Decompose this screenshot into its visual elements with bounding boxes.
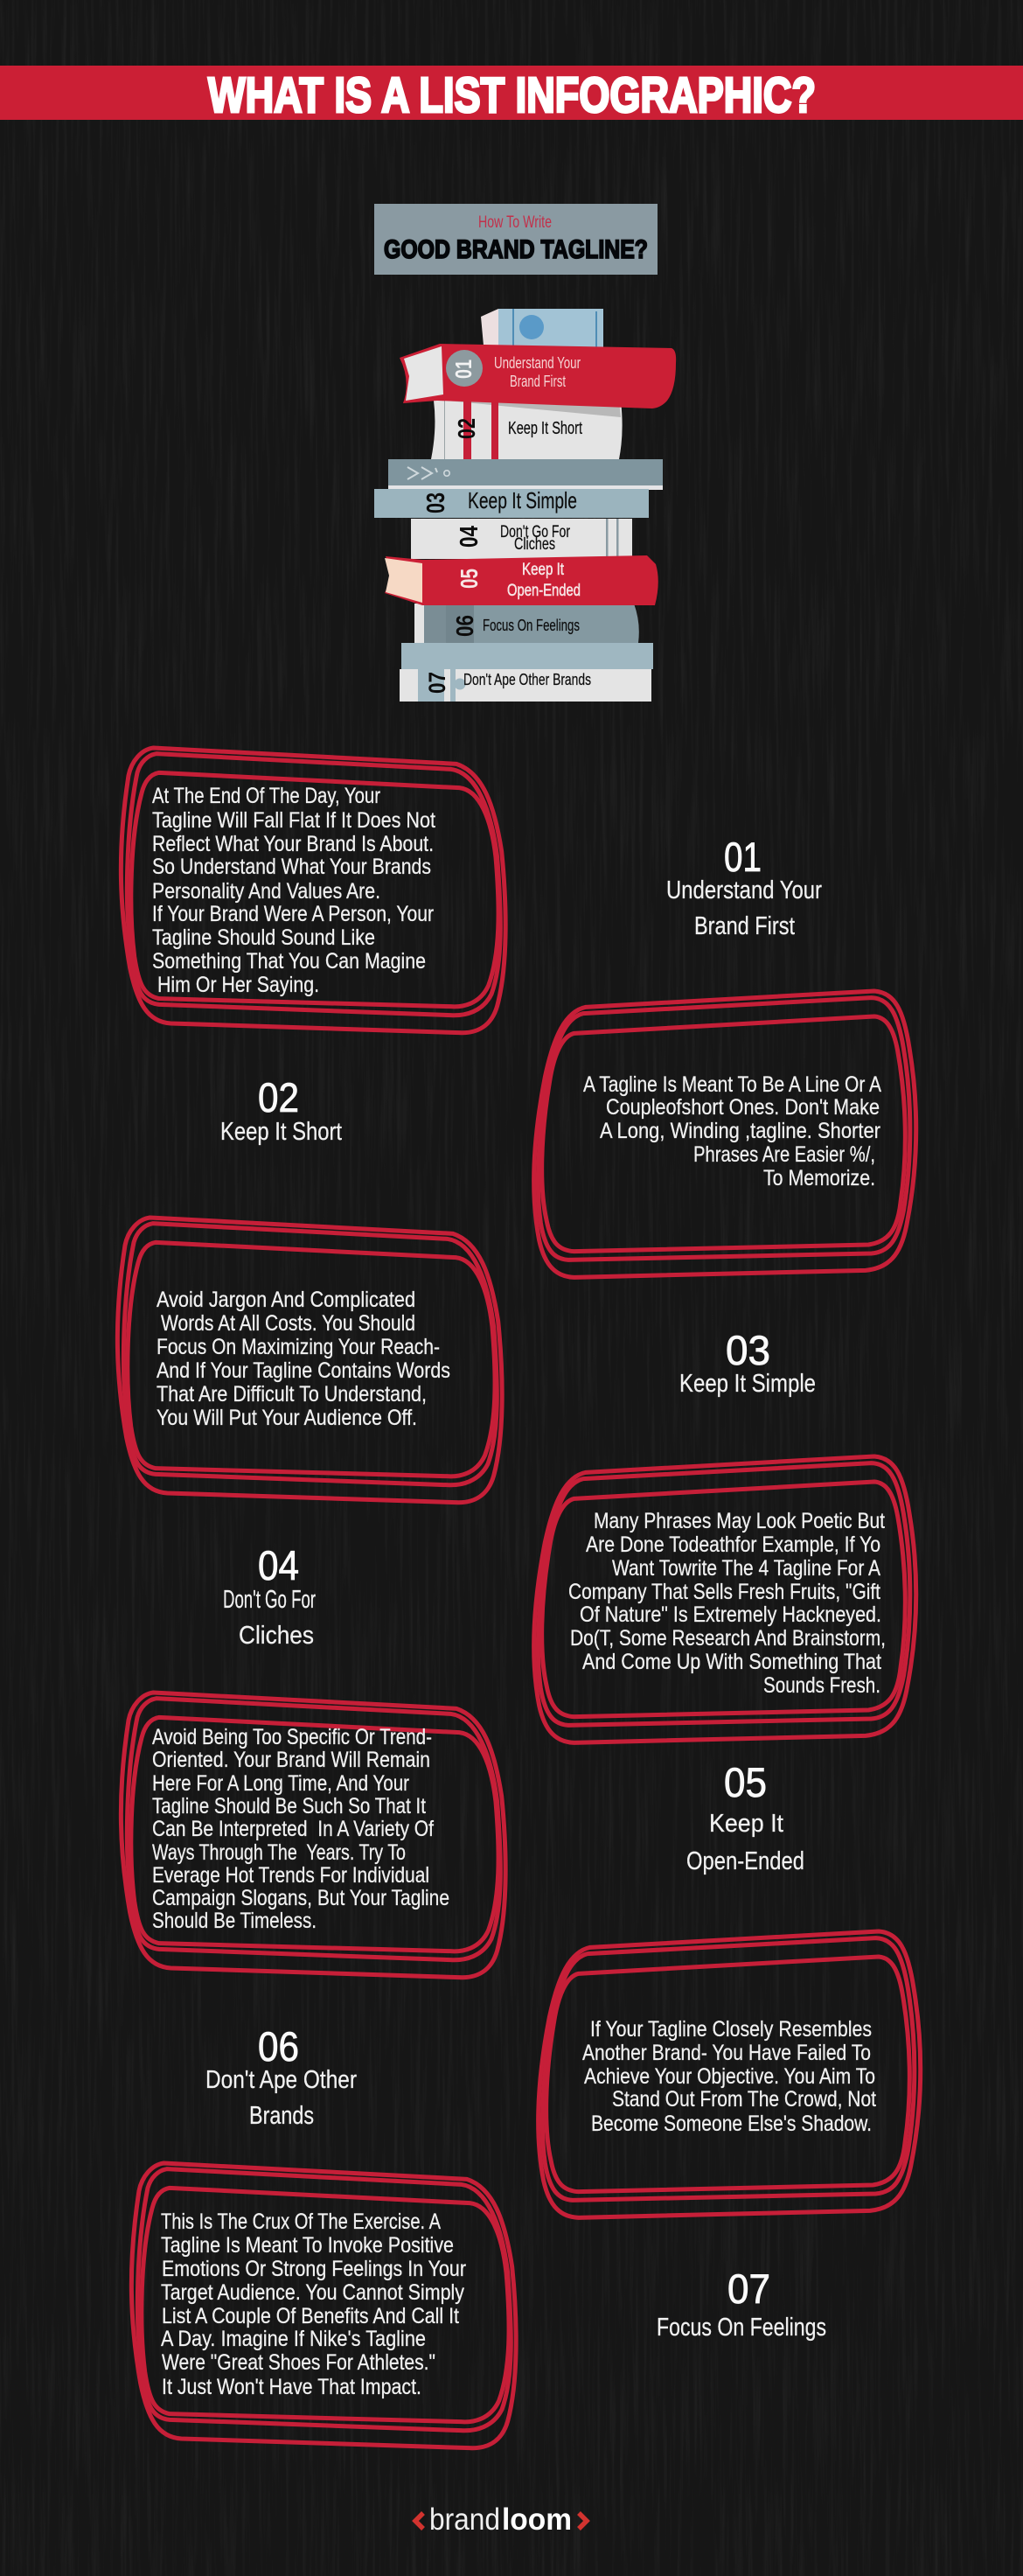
panel 01: red scribble and text: Tagline Will Fall Flat If It Does Not [152, 808, 435, 833]
book stack illustration [374, 204, 676, 702]
panel 05: red scribble and text: Can Be Interpreted In A Variety Of [152, 1817, 434, 1841]
heading 06: Don't Ape Other [205, 2066, 357, 2094]
panel 05: red scribble and text [121, 1693, 505, 1978]
panel 05: red scribble and text: Campaign Slogans, But Your Tagline [152, 1886, 449, 1910]
panel 07: red scribble and text: List A Couple Of Benefits And Call It [162, 2304, 459, 2328]
heading 06 [205, 2023, 357, 2130]
panel 03: red scribble and text: And If Your Tagline Contains Words [157, 1358, 450, 1383]
panel 03: red scribble and text: Focus On Maximizing Your Reach- [157, 1335, 440, 1359]
panel 04: red scribble and text: Many Phrases May Look Poetic But [594, 1509, 885, 1533]
heading 02: 02 [258, 1074, 299, 1120]
book 05: keep it open-ended: Open-Ended [507, 582, 581, 600]
panel 05: red scribble and text: Avoid Being Too Specific Or Trend- [152, 1725, 432, 1749]
panel 07: red scribble and text: Target Audience. You Cannot Simply [161, 2280, 464, 2305]
panel 05: red scribble and text: Everage Hot Trends For Individual [152, 1863, 429, 1888]
book 01: understand your brand first: 01 [450, 360, 477, 379]
panel 03: red scribble and text: You Will Put Your Audience Off. [157, 1406, 417, 1430]
heading 04: 04 [258, 1542, 299, 1588]
panel 04: red scribble and text: Of Nature" Is Extremely Hackneyed. [580, 1602, 881, 1627]
panel 06: red scribble and text: If Your Tagline Closely Resembles [590, 2017, 872, 2042]
panel 04: red scribble and text: And Come Up With Something That [582, 1650, 881, 1674]
title band [0, 66, 1023, 123]
panel 05: red scribble and text: Oriented. Your Brand Will Remain [152, 1748, 430, 1772]
book 07: don't ape other brands [400, 643, 653, 702]
book 01: understand your brand first: Understand Your [494, 354, 581, 372]
plain grey book [388, 459, 663, 490]
panel 03: red scribble and text: That Are Difficult To Understand, [157, 1382, 427, 1407]
book 07: don't ape other brands: 07 [424, 672, 450, 694]
panel 01: red scribble and text: Personality And Values Are. [152, 879, 380, 904]
heading 03: 03 [726, 1327, 770, 1373]
title: WHAT IS A LIST INFOGRAPHIC? [208, 67, 816, 123]
brandloom logo [415, 2503, 587, 2537]
book 01: understand your brand first: Brand First [510, 373, 566, 390]
subtitle panel: GOOD BRAND TAGLINE? [384, 235, 648, 264]
panel 07: red scribble and text: Tagline Is Meant To Invoke Positive [161, 2233, 454, 2258]
heading 07: Focus On Feelings [657, 2314, 826, 2342]
heading 02: Keep It Short [220, 1118, 342, 1146]
panel 04: red scribble and text: Company That Sells Fresh Fruits, "Gift [568, 1580, 880, 1604]
panel 02: red scribble and text: A Long, Winding ,tagline. Shorter [600, 1119, 880, 1143]
heading 07: 07 [727, 2265, 770, 2312]
book 06: focus on feelings: Focus On Feelings [483, 617, 580, 634]
panel 07: red scribble and text: This Is The Crux Of The Exercise. A [161, 2209, 441, 2234]
panel 06: red scribble and text: Achieve Your Objective. You Aim To [584, 2064, 875, 2089]
panel 04: red scribble and text: Sounds Fresh. [763, 1673, 880, 1698]
book 02: keep it short: 02 [453, 418, 480, 439]
book 07: don't ape other brands: Don't Ape Other Brands [463, 670, 591, 688]
panel 06: red scribble and text: Stand Out From The Crowd, Not [612, 2087, 876, 2112]
heading 05: Open-Ended [686, 1847, 804, 1875]
panel 05: red scribble and text: Tagline Should Be Such So That It [152, 1794, 426, 1819]
panel 03: red scribble and text: Avoid Jargon And Complicated [157, 1288, 415, 1312]
book 05: keep it open-ended: Keep It [522, 561, 565, 579]
heading 04 [223, 1542, 316, 1650]
heading 05 [686, 1759, 804, 1875]
heading 06: Brands [249, 2102, 314, 2130]
panel 02: red scribble and text: To Memorize. [763, 1166, 875, 1190]
brandloom logo: brand [429, 2503, 500, 2537]
book 05: keep it open-ended [385, 555, 658, 605]
panel 06: red scribble and text [539, 1931, 921, 2217]
book 03: keep it simple: 03 [422, 492, 450, 513]
panel 01: red scribble and text: Tagline Should Sound Like [152, 925, 375, 950]
panel 02: red scribble and text: Coupleofshort Ones. Don't Make [606, 1095, 880, 1120]
heading 05: 05 [724, 1759, 767, 1805]
book 02: keep it short [431, 401, 623, 459]
heading 01 [666, 834, 822, 940]
book 06: focus on feelings [414, 604, 639, 643]
heading 01: Brand First [694, 912, 795, 940]
panel 05: red scribble and text: Ways Through The Years. Try To [152, 1840, 406, 1865]
heading 02 [220, 1074, 342, 1146]
book 04: don't go for cliches: Don't Go For [500, 523, 570, 541]
panel 05: red scribble and text: Should Be Timeless. [152, 1909, 317, 1933]
panel 03: red scribble and text [117, 1218, 502, 1503]
brandloom logo: loom [502, 2503, 572, 2537]
book 05: keep it open-ended: 05 [456, 569, 483, 589]
book 04: don't go for cliches [411, 519, 632, 559]
heading 05: Keep It [709, 1810, 783, 1838]
panel 06: red scribble and text: Become Someone Else's Shadow. [591, 2112, 872, 2136]
panel 07: red scribble and text: It Just Won't Have That Impact. [162, 2375, 421, 2399]
heading 04: Don't Go For [223, 1586, 316, 1614]
panel 01: red scribble and text: If Your Brand Were A Person, Your [152, 902, 434, 926]
book 04: don't go for cliches: Cliches [514, 535, 555, 554]
panel 07: red scribble and text: Emotions Or Strong Feelings In Your [162, 2257, 466, 2281]
panel 02: red scribble and text [534, 991, 916, 1277]
heading 04: Cliches [239, 1622, 314, 1650]
book 04: don't go for cliches: 04 [456, 526, 484, 548]
panel 04: red scribble and text: Want Towrite The 4 Tagline For A [612, 1556, 880, 1581]
book 01: understand your brand first [400, 344, 676, 408]
heading 03: Keep It Simple [679, 1370, 816, 1398]
panel 05: red scribble and text: Here For A Long Time, And Your [152, 1771, 409, 1796]
panel 01: red scribble and text: At The End Of The Day, Your [152, 784, 380, 808]
book 02: keep it short: Keep It Short [508, 419, 582, 438]
panel 04: red scribble and text [534, 1456, 916, 1742]
heading 03 [679, 1327, 816, 1398]
panel 02: red scribble and text: A Tagline Is Meant To Be A Line Or A [583, 1072, 881, 1097]
heading 01: 01 [724, 834, 762, 880]
heading 07 [657, 2265, 826, 2342]
panel 07: red scribble and text: A Day. Imagine If Nike's Tagline [161, 2327, 426, 2351]
subtitle panel: How To Write [478, 213, 552, 232]
panel 03: red scribble and text: Words At All Costs. You Should [161, 1311, 415, 1336]
subtitle panel [374, 204, 658, 275]
panel 06: red scribble and text: Another Brand- You Have Failed To [582, 2041, 871, 2065]
panel 01: red scribble and text: Him Or Her Saying. [157, 973, 319, 997]
panel 01: red scribble and text: So Understand What Your Brands [152, 855, 431, 879]
book 03: keep it simple: Keep It Simple [468, 487, 577, 513]
panel 07: red scribble and text: Were "Great Shoes For Athletes." [162, 2350, 435, 2375]
panel 01: red scribble and text: Something That You Can Magine [152, 949, 426, 974]
panel 01: red scribble and text: Reflect What Your Brand Is About. [152, 832, 434, 856]
heading 06: 06 [258, 2023, 299, 2070]
heading 01: Understand Your [666, 876, 822, 904]
panel 02: red scribble and text: Phrases Are Easier %/, [693, 1142, 875, 1167]
book 06: focus on feelings: 06 [451, 615, 478, 637]
book 03: keep it simple [374, 487, 649, 518]
panel 04: red scribble and text: Do(T, Some Research And Brainstorm, [570, 1626, 886, 1651]
panel 01: red scribble and text [121, 748, 505, 1033]
panel 07: red scribble and text [131, 2163, 516, 2448]
panel 04: red scribble and text: Are Done Todeathfor Example, If Yo [586, 1532, 880, 1557]
icon: top blue book [481, 309, 603, 347]
